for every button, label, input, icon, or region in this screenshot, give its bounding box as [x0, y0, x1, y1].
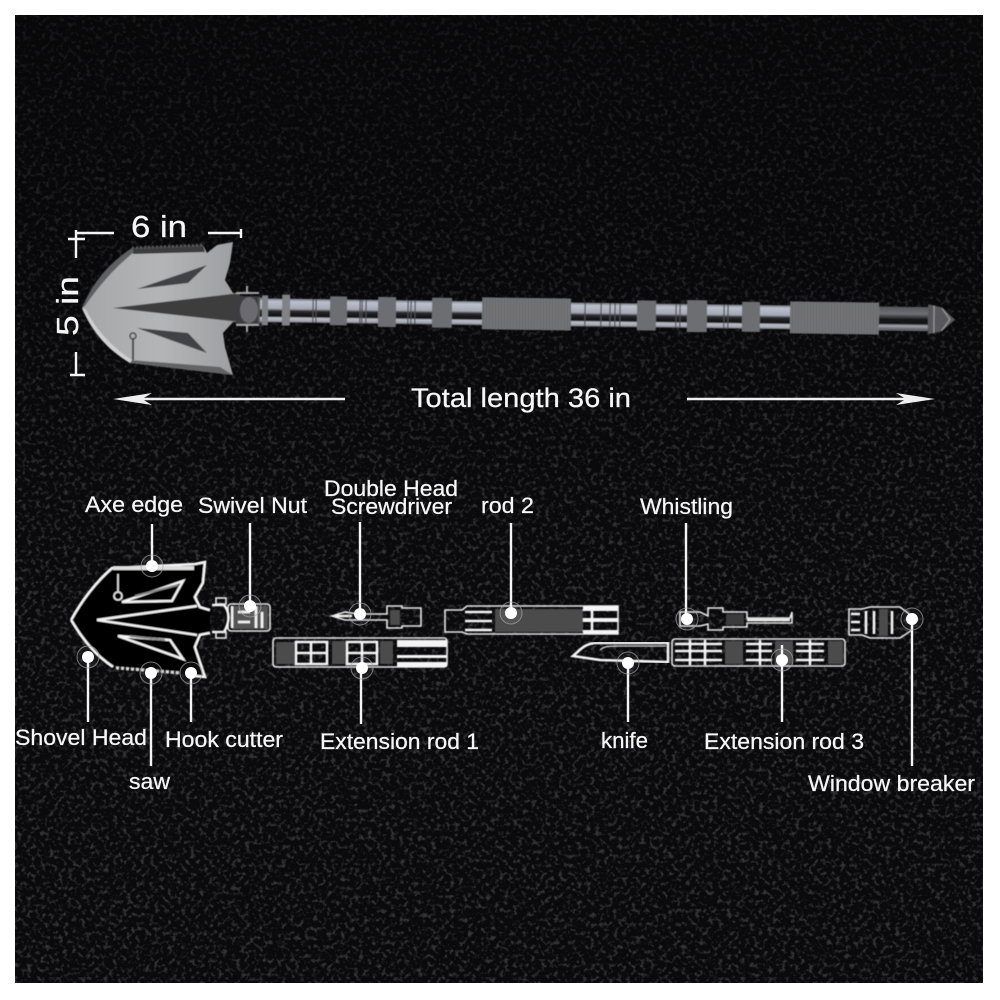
shovel photo — [82, 242, 955, 375]
callout: extension rod 3: Extension rod 3 — [704, 729, 864, 754]
total length with arrows — [113, 383, 935, 413]
callout: axe edge — [85, 492, 183, 577]
exploded diagram: window breaker — [849, 607, 912, 638]
dimension: height 5 in: 5 in — [50, 276, 85, 336]
exploded diagram: whistling — [680, 608, 792, 630]
exploded diagram: swivel nut — [212, 598, 270, 638]
callout: extension rod 1: Extension rod 1 — [320, 729, 479, 754]
dimension: width 6 in — [76, 209, 241, 244]
callout: window breaker: Window breaker — [808, 771, 975, 796]
exploded diagram: extension rod 1 — [273, 638, 447, 667]
callout: axe edge: Axe edge — [85, 492, 183, 517]
callout: rod 2: rod 2 — [481, 493, 534, 518]
callout: double head screwdriver: Screwdriver — [331, 494, 452, 519]
callout: rod 2 — [481, 493, 534, 624]
callout: shovel head — [15, 646, 147, 750]
callout: extension rod 3 — [704, 645, 864, 754]
callout: saw: saw — [129, 769, 170, 794]
callout: double head screwdriver: Double Head — [324, 476, 458, 501]
callout: knife — [601, 652, 648, 753]
shovel blade — [82, 242, 240, 375]
callout: hook cutter: Hook cutter — [165, 727, 283, 752]
callout: hook cutter — [165, 662, 283, 752]
callout: swivel nut: Swivel Nut — [198, 493, 307, 518]
exploded diagram: shovel head — [71, 562, 210, 677]
exploded diagram: knife — [573, 643, 668, 662]
exploded diagram: screwdriver — [332, 606, 421, 628]
callout: knife: knife — [601, 728, 648, 753]
callout: double head screwdriver — [324, 476, 458, 625]
callout: window breaker — [808, 608, 975, 796]
dimension: width 6 in: 6 in — [131, 209, 187, 244]
dimension: height 5 in — [50, 230, 85, 376]
callout: whistling: Whistling — [640, 494, 733, 519]
callout: saw — [129, 662, 170, 794]
callout: whistling — [640, 494, 733, 630]
exploded diagram: rod 2 — [445, 606, 618, 634]
callout: swivel nut — [198, 493, 307, 617]
callout: extension rod 1 — [320, 657, 479, 754]
callout: shovel head: Shovel Head — [15, 725, 147, 750]
exploded diagram: extension rod 3 — [672, 639, 845, 666]
telescopic handle — [236, 294, 955, 336]
side pin — [236, 286, 259, 332]
total length with arrows: Total length 36 in — [411, 383, 631, 413]
